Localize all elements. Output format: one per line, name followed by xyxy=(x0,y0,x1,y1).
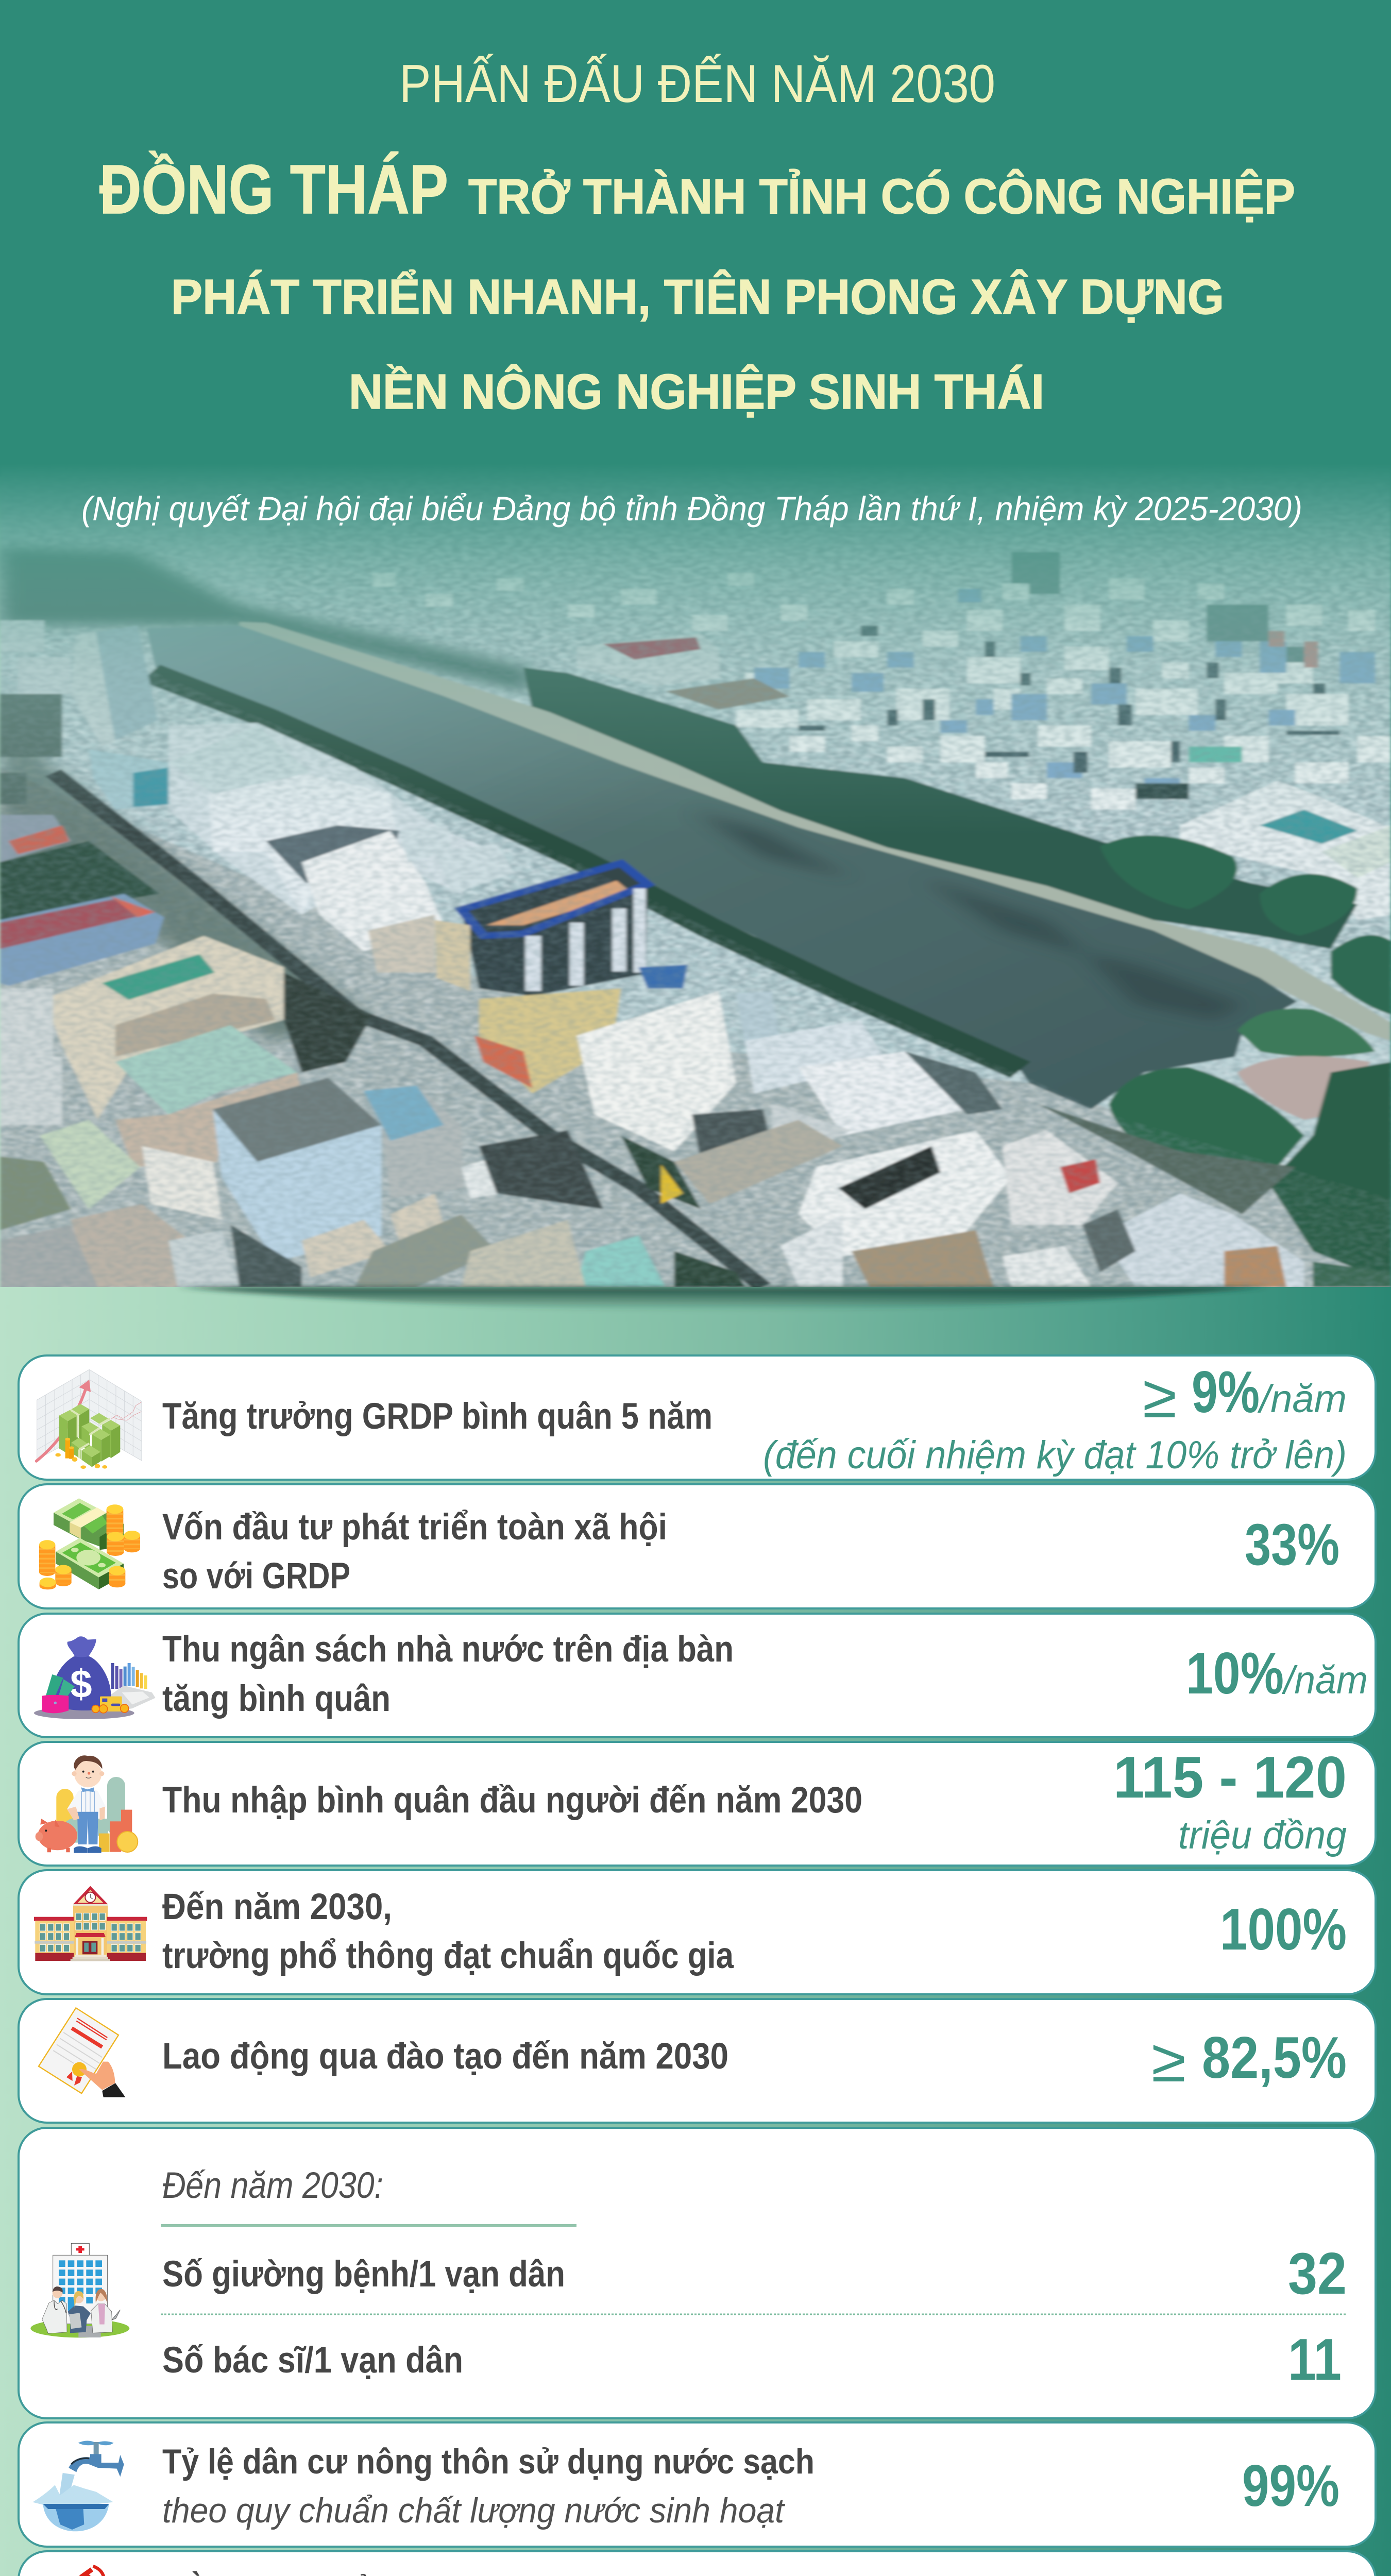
red roof hall xyxy=(576,634,720,686)
value: at least 82.5% xyxy=(1151,2025,1347,2095)
icon: school building xyxy=(34,1886,147,1961)
river xyxy=(146,625,1297,1109)
header band xyxy=(0,0,1391,477)
title line 1: TRỞ THÀNH TỈNH CÓ CÔNG NGHIỆP xyxy=(468,168,1295,224)
sub-heading: Đến năm 2030: xyxy=(162,2165,383,2206)
value: 100%: 100% xyxy=(1220,1897,1347,1962)
big white block xyxy=(213,1078,381,1262)
value note: (đến cuối nhiệm kỳ đạt 10% trở lên) xyxy=(763,1433,1347,1477)
left side rooftops xyxy=(0,620,71,694)
icon: hammer and sickle over meeting group xyxy=(35,2566,138,2576)
rooftops right city xyxy=(372,573,1391,809)
label: tăng bình quân xyxy=(162,1679,391,1719)
panel: clean water xyxy=(19,2422,1376,2547)
row: doctors: Số bác sĩ/1 vạn dân xyxy=(162,2340,463,2381)
shadow under photo xyxy=(177,1287,1268,1311)
label: Tăng trưởng GRDP bình quân 5 năm xyxy=(162,1396,713,1437)
value: 115 - 120 million dong: 115 - 120 xyxy=(1113,1745,1347,1810)
panel: social investment xyxy=(19,1484,1376,1608)
promenade xyxy=(240,622,1391,1041)
panel: health targets xyxy=(19,2128,1376,2418)
panel: income per capita xyxy=(19,1742,1376,1866)
label: theo quy chuẩn chất lượng nước sinh hoạt xyxy=(162,2491,786,2530)
round roof and left bottom xyxy=(40,1120,140,1209)
value: 10% per year: 10% xyxy=(1186,1641,1284,1706)
value: 33%: 33% xyxy=(1245,1512,1339,1578)
haze fade at top of photo xyxy=(0,464,1391,835)
icon: man with piggy bank xyxy=(36,1755,138,1853)
industrial roof xyxy=(115,1025,297,1114)
icon: water tap and bowl xyxy=(32,2441,124,2531)
label: trường phổ thông đạt chuẩn quốc gia xyxy=(162,1936,734,1976)
value: at least 9% per year: ≥ xyxy=(1143,1363,1177,1431)
label xyxy=(162,2442,815,2530)
row: hospital beds: 32 xyxy=(1288,2241,1347,2307)
icon: certificate in hand xyxy=(39,2008,125,2097)
park and plaza xyxy=(1237,1008,1375,1057)
value: at least 9% per year: 9% xyxy=(1192,1360,1260,1425)
label xyxy=(162,1629,734,1719)
label xyxy=(162,1507,667,1597)
fine grain over the lower city xyxy=(0,620,1391,1298)
icon: hospital and medical staff xyxy=(30,2243,129,2337)
left bank trees xyxy=(151,673,1020,1070)
title line 3: NỀN NÔNG NGHIỆP SINH THÁI xyxy=(349,364,1044,419)
source note: (Nghị quyết Đại hội đại biểu Đảng bộ tỉnh Đồng Tháp lần thứ I, nhiệm kỳ 2025-2030) xyxy=(81,489,1302,528)
kicker: PHẤN ĐẤU ĐẾN NĂM 2030 xyxy=(399,54,995,114)
dark gap between blocks xyxy=(284,973,372,1073)
title line 2: PHÁT TRIỂN NHANH, TIÊN PHONG XÂY DỰNG xyxy=(171,269,1224,325)
row: hospital beds: Số giường bệnh/1 vạn dân xyxy=(162,2254,565,2295)
trees along right bank xyxy=(523,668,1358,949)
label: Thu nhập bình quân đầu người đến năm 2030 xyxy=(162,1780,862,1821)
value: at least 9% per year: /năm xyxy=(1257,1377,1347,1421)
panel: party organisations xyxy=(19,2551,1376,2576)
photo: aerial view of Cao Lanh city and river xyxy=(0,457,1391,1298)
panel: state budget revenue xyxy=(19,1614,1376,1737)
value: 10% per year xyxy=(1186,1641,1368,1706)
blue office building xyxy=(461,863,648,996)
title line 1: ĐỒNG THÁP xyxy=(99,150,448,228)
icon: money bag, wallet and card xyxy=(34,1636,156,1719)
title line 1 xyxy=(99,150,1295,228)
row: hospital beds xyxy=(162,2241,1347,2307)
right large white building xyxy=(1180,781,1391,920)
value: at least 82.5%: ≥ xyxy=(1151,2027,1186,2095)
value: 115 - 120 million dong xyxy=(1113,1745,1347,1857)
label: Vốn đầu tư phát triển toàn xã hội xyxy=(162,1507,667,1548)
fine grain over the upper city xyxy=(0,457,1391,983)
icon: cash and coins xyxy=(39,1498,140,1589)
road xyxy=(53,773,763,1287)
icon: money bag, wallet and card: $ xyxy=(70,1663,92,1706)
label xyxy=(162,1887,734,1976)
value: at least 82.5%: 82,5% xyxy=(1202,2025,1347,2091)
label: Lao động qua đào tạo đến năm 2030 xyxy=(162,2036,728,2077)
label: Đến năm 2030, xyxy=(162,1887,392,1927)
label: so với GRDP xyxy=(162,1556,350,1597)
row: doctors: 11 xyxy=(1288,2327,1342,2393)
hazy trees upper left xyxy=(0,547,532,694)
value: 10% per year: /năm xyxy=(1281,1658,1368,1702)
value: 99%: 99% xyxy=(1242,2453,1339,2519)
cream hotel with teal roof xyxy=(44,936,284,1120)
icon: money stacks with growth chart xyxy=(37,1369,142,1469)
title block xyxy=(81,54,1302,528)
center blocks xyxy=(479,988,621,1093)
panel: trained labour xyxy=(19,1999,1376,2123)
value: at least 9% per year xyxy=(1143,1360,1347,1431)
label: Thu ngân sách nhà nước trên địa bàn xyxy=(162,1629,734,1670)
value: 115 - 120 million dong: triệu đồng xyxy=(1178,1814,1347,1857)
panel: national standard schools xyxy=(19,1870,1376,1994)
label: Tỷ lệ dân cư nông thôn sử dụng nước sạch xyxy=(162,2442,815,2481)
row: doctors xyxy=(162,2327,1342,2393)
panel: GRDP growth xyxy=(19,1355,1376,1480)
